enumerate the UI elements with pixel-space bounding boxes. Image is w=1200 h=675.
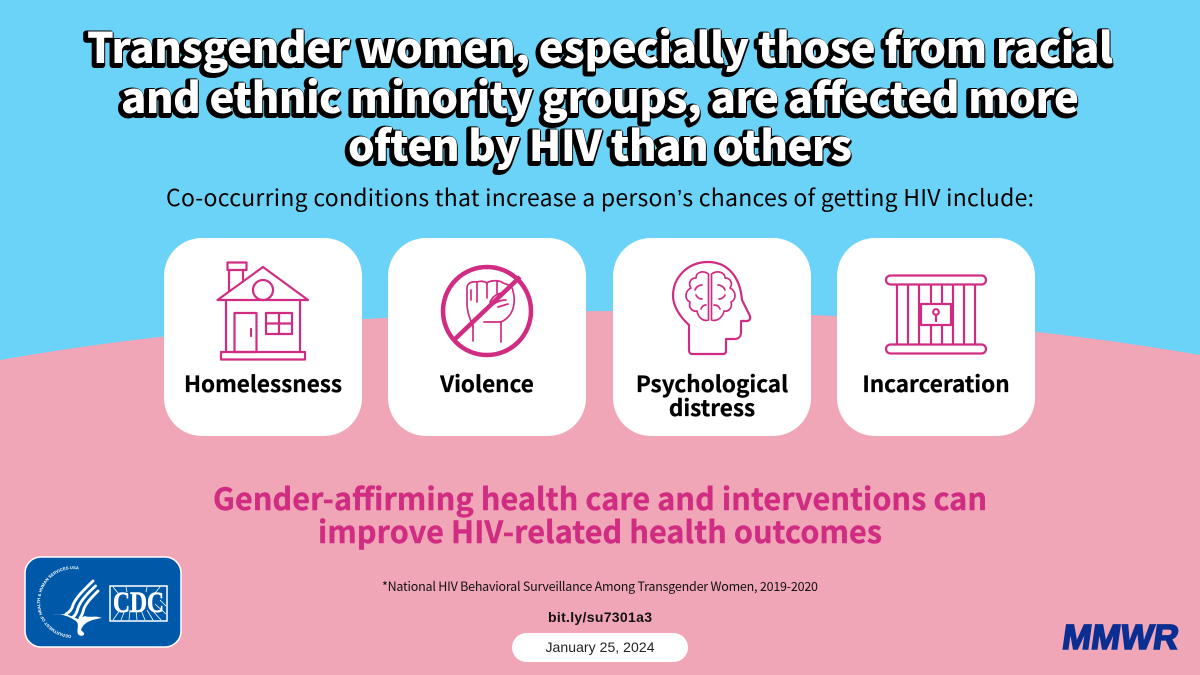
title: often by HIV than others bbox=[348, 113, 852, 174]
label: incarceration: Incarceration bbox=[862, 367, 1010, 399]
logo: CDC: CDC bbox=[113, 586, 164, 619]
icon: jail bars bbox=[886, 276, 986, 354]
title: Transgender women, especially those from racial bbox=[85, 17, 1111, 78]
icon: HHS eagle bbox=[37, 566, 102, 638]
icon: head with brain bbox=[673, 262, 750, 354]
logo: HHS and CDC bbox=[24, 556, 182, 648]
footnote: *National HIV Behavioral Surveillance Among Transgender Women, 2019-2020 bbox=[382, 576, 818, 595]
title: often by HIV than others bbox=[346, 115, 850, 176]
subheading: Co-occurring conditions that increase a person’s chances of getting HIV include: bbox=[166, 179, 1034, 213]
link: bit.ly/su7301a3 bbox=[548, 609, 652, 625]
label: violence: Violence bbox=[439, 367, 534, 399]
icon: HHS eagle: DEPARTMENT OF HEALTH & HUMAN SERVICES USA bbox=[37, 566, 79, 638]
label: psychological distress bbox=[636, 367, 788, 423]
icon: no-violence fist bbox=[443, 267, 531, 355]
label: homelessness: Homelessness bbox=[184, 367, 342, 399]
date pill: January 25, 2024 bbox=[546, 639, 655, 655]
panel: homelessness bbox=[164, 238, 362, 436]
label: psychological distress: distress bbox=[669, 391, 755, 423]
label: psychological distress: Psychological bbox=[636, 367, 788, 399]
background: pink hill bbox=[0, 311, 1200, 675]
icon: house bbox=[218, 262, 308, 360]
callout: gender-affirming care bbox=[213, 475, 987, 552]
panel: violence bbox=[388, 238, 586, 436]
title: and ethnic minority groups, are affected more bbox=[119, 67, 1077, 128]
panel: psychological distress bbox=[613, 238, 811, 436]
panel: incarceration bbox=[837, 238, 1035, 436]
date pill bbox=[512, 633, 688, 662]
title: Transgender women, especially those from racial bbox=[87, 15, 1113, 76]
callout: gender-affirming care: Gender-affirming health care and interventions can bbox=[213, 475, 987, 519]
title: and ethnic minority groups, are affected more bbox=[121, 65, 1079, 126]
title bbox=[85, 15, 1113, 176]
callout: gender-affirming care: improve HIV-related health outcomes bbox=[318, 508, 882, 552]
logo: MMWR: MMWR bbox=[1060, 618, 1181, 657]
